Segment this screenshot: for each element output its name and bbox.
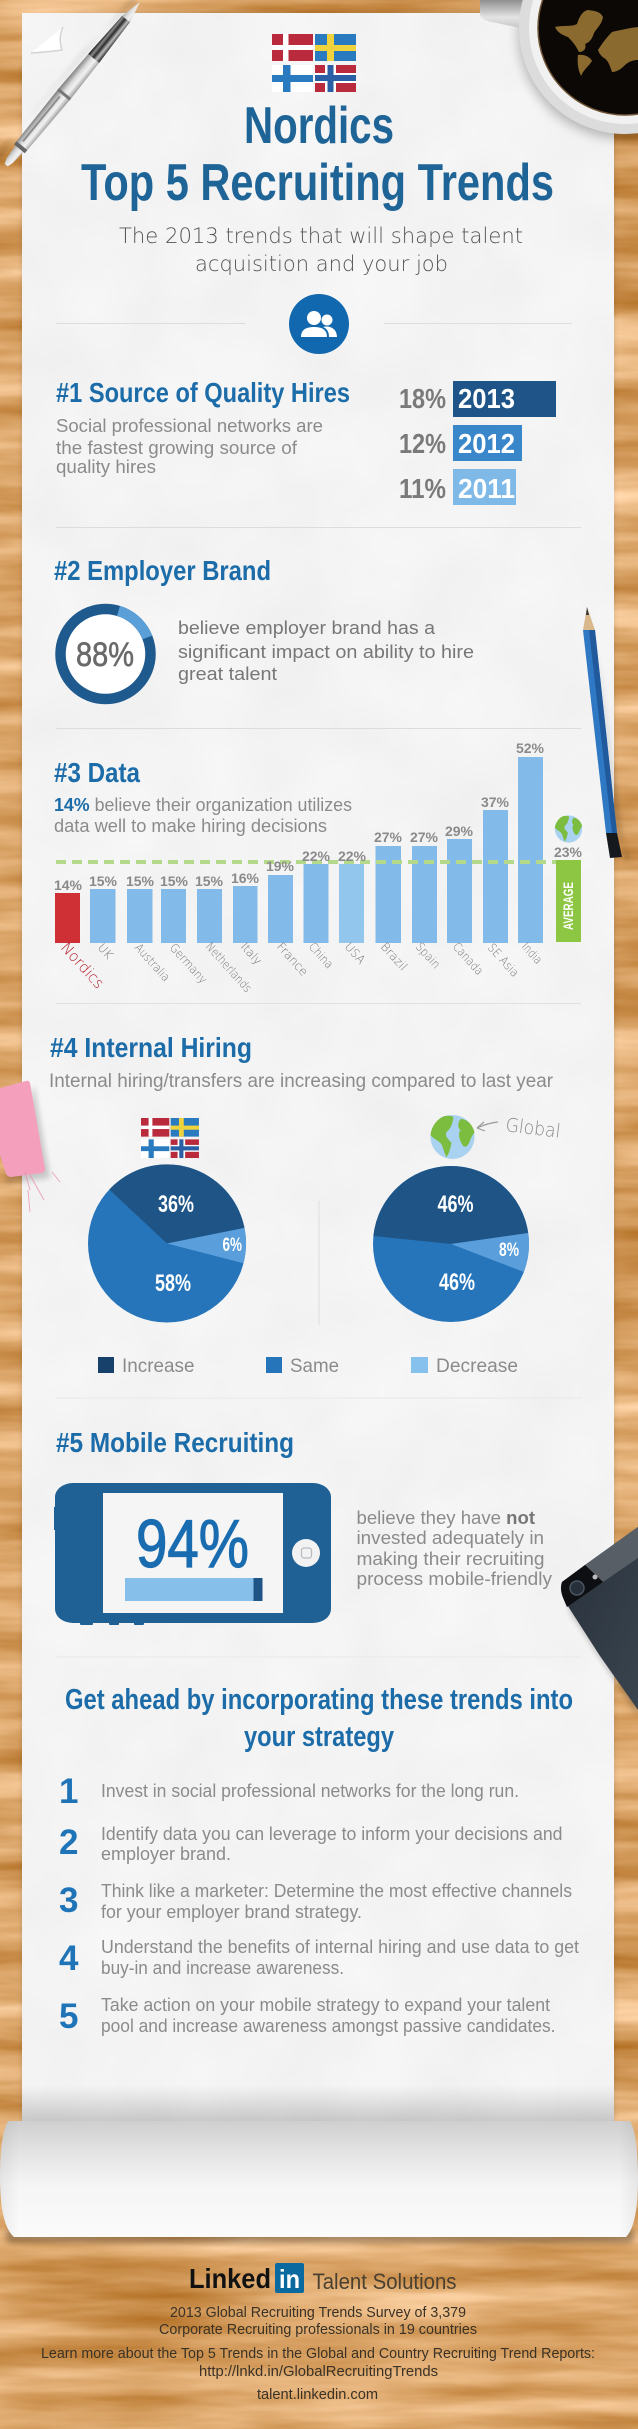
footer logo: LinkedIn Talent Solutions	[189, 2263, 456, 2294]
step 3: 3	[59, 1881, 78, 1920]
country labels: China	[306, 940, 336, 971]
bar chart: data use by country: 15%	[89, 873, 118, 889]
icon: ballpoint pen	[0, 0, 146, 170]
title: Nordics	[244, 97, 394, 155]
bar chart: data use by country: AVERAGE	[560, 882, 576, 930]
text block	[56, 416, 323, 477]
icon: blue pencil	[583, 607, 631, 860]
bar chart: share by year: 2013	[458, 383, 515, 414]
step 4: 4	[59, 1939, 79, 1978]
panel: #4 internal hiring	[49, 1032, 562, 1377]
step 5: Take action on your mobile strategy to expand your talent	[101, 1995, 550, 2015]
icon: phone illustration with 94%	[54, 1483, 331, 1625]
bar chart: data use by country: 15%	[126, 873, 155, 889]
country labels: India	[519, 940, 545, 967]
step 4: buy-in and increase awareness.	[101, 1958, 344, 1978]
bar chart: data use by country: 15%	[160, 873, 189, 889]
step 2: employer brand.	[101, 1844, 231, 1864]
bar chart: data use by country: 23%	[554, 844, 583, 860]
pie chart: Nordics: 6%	[222, 1235, 242, 1256]
bar chart: share by year: 11%	[399, 473, 446, 504]
bar chart: data use by country: 27%	[374, 829, 403, 845]
country labels: Canada	[450, 940, 486, 978]
bar chart: share by year: 12%	[399, 428, 446, 459]
footer text: http://lnkd.in/GlobalRecruitingTrends	[199, 2363, 438, 2380]
bar chart: data use by country: 14%	[54, 877, 83, 893]
label: Global with arrow: Global	[504, 1114, 562, 1143]
footer text: Learn more about the Top 5 Trends in the Global and Country Recruiting Trend Reports:	[41, 2345, 595, 2362]
step 3: for your employer brand strategy.	[101, 1902, 362, 1922]
bar chart: share by year: 18%	[399, 383, 446, 414]
bar chart: data use by country	[54, 740, 583, 995]
heading: #1 Source of Quality Hires	[56, 377, 350, 408]
divider with people icon	[56, 294, 572, 354]
pie chart: Nordics	[88, 1164, 246, 1322]
icon: globe	[555, 815, 582, 843]
legend: Increase	[122, 1356, 194, 1377]
text block: process mobile-friendly	[356, 1569, 552, 1589]
country labels: France	[274, 940, 311, 979]
donut chart: 88%	[60, 609, 150, 699]
country labels: Nordics	[57, 939, 108, 992]
icon: iPhone on table	[561, 1527, 638, 1716]
subtitle: acquisition and your job	[195, 252, 448, 276]
country labels: Germany	[167, 941, 210, 986]
bar chart: data use by country: 22%	[338, 848, 367, 864]
text block: 14% believe their organization utilizes	[54, 795, 352, 815]
step 3	[59, 1881, 572, 1922]
step 2	[59, 1823, 562, 1864]
subtitle	[119, 224, 523, 276]
bar chart: data use by country: 52%	[516, 740, 545, 756]
country labels: USA	[342, 940, 368, 967]
subtitle: The 2013 trends that will shape talent	[119, 224, 523, 248]
panel: #5 mobile recruiting	[54, 1427, 552, 1625]
step 3: Think like a marketer: Determine the most effective channels	[101, 1881, 572, 1901]
country labels: Spain	[413, 940, 443, 971]
icon: pink eraser	[0, 1081, 60, 1212]
rolled paper bottom	[0, 2121, 638, 2243]
step 1: Invest in social professional networks for the long run.	[101, 1781, 519, 1801]
text block: data well to make hiring decisions	[54, 816, 327, 836]
footer text: 2013 Global Recruiting Trends Survey of 3,379	[170, 2304, 466, 2321]
country labels: Netherlands	[203, 940, 255, 995]
footer logo: LinkedIn Talent Solutions: Linked	[189, 2263, 271, 2294]
text block: quality hires	[56, 457, 156, 477]
text block: invested adequately in	[356, 1528, 544, 1548]
heading: #5 Mobile Recruiting	[56, 1427, 294, 1458]
icon: phone illustration with 94%: 94%	[136, 1506, 249, 1582]
footer logo: LinkedIn Talent Solutions: in	[279, 2264, 300, 2294]
pie chart: Global: 8%	[499, 1240, 519, 1261]
panel: get ahead recommendations	[59, 1684, 579, 2036]
icon: coffee cup	[480, 0, 638, 138]
icon: gold world map in coffee	[555, 10, 638, 76]
text block: making their recruiting	[356, 1549, 544, 1569]
bar chart: data use by country: 29%	[445, 823, 474, 839]
text block	[54, 795, 352, 836]
bar chart: data use by country: 15%	[195, 873, 224, 889]
bar chart: data use by country: 19%	[266, 858, 295, 874]
country labels	[57, 939, 545, 995]
panel: #1 source of quality hires	[56, 377, 556, 505]
footer logo: LinkedIn Talent Solutions: Talent Solutions	[312, 2269, 456, 2294]
step 2: Identify data you can leverage to inform your decisions and	[101, 1824, 562, 1844]
panel: #2 employer brand	[54, 555, 474, 699]
step 5: 5	[59, 1997, 78, 2036]
country labels: Italy	[238, 940, 265, 968]
step 1	[59, 1772, 519, 1811]
footer text	[41, 2304, 595, 2403]
title	[81, 97, 554, 212]
legend: Same	[290, 1356, 339, 1377]
heading: #3 Data	[54, 757, 140, 788]
icon: flags of the Nordics	[141, 1118, 199, 1158]
step 1: 1	[59, 1772, 78, 1811]
bar chart: data use by country: 27%	[410, 829, 439, 845]
text block: great talent	[178, 664, 277, 684]
bar chart: data use by country: 22%	[302, 848, 331, 864]
bar chart: data use by country: 16%	[231, 870, 260, 886]
footer text: Corporate Recruiting professionals in 19 countries	[159, 2321, 477, 2338]
text block: the fastest growing source of	[56, 438, 298, 458]
step 2: 2	[59, 1823, 78, 1862]
pie chart: Global	[373, 1166, 529, 1322]
icon: globe	[430, 1115, 474, 1159]
footer text: talent.linkedin.com	[257, 2386, 378, 2403]
panel: #3 data	[54, 740, 583, 995]
text block: Internal hiring/transfers are increasing compared to last year	[49, 1071, 554, 1092]
step 4: Understand the benefits of internal hiring and use data to get	[101, 1937, 579, 1957]
pie chart: Nordics: 58%	[155, 1270, 191, 1297]
heading: your strategy	[244, 1721, 394, 1753]
legend: Decrease	[436, 1356, 518, 1377]
bar chart: share by year: 2012	[458, 428, 515, 459]
text block	[178, 618, 474, 684]
bar chart: share by year: 2011	[458, 473, 515, 504]
donut chart: 88%: 88%	[76, 636, 134, 674]
pie chart: Global: 46%	[438, 1191, 474, 1218]
step 5: pool and increase awareness amongst passive candidates.	[101, 2016, 556, 2036]
country labels: Australia	[132, 941, 173, 984]
text block: significant impact on ability to hire	[178, 642, 474, 662]
text block	[356, 1508, 552, 1589]
country labels: SE Asia	[485, 941, 522, 980]
bar chart: share by year	[399, 381, 556, 505]
icon: flags of the Nordics	[272, 34, 356, 92]
text block: believe they have not	[356, 1508, 535, 1528]
label: Global with arrow	[477, 1114, 562, 1143]
heading: #4 Internal Hiring	[50, 1032, 252, 1063]
heading	[65, 1684, 573, 1753]
heading: #2 Employer Brand	[54, 555, 271, 586]
step 5	[59, 1995, 556, 2036]
country labels: UK	[95, 941, 116, 962]
pie chart: Nordics: 36%	[158, 1191, 194, 1218]
pie chart: Global: 46%	[439, 1269, 475, 1296]
text block: believe employer brand has a	[178, 618, 436, 638]
country labels: Brazil	[378, 940, 410, 974]
bar chart: data use by country: 37%	[481, 794, 510, 810]
legend	[98, 1356, 518, 1377]
step 4	[59, 1937, 579, 1978]
text block: Social professional networks are	[56, 416, 323, 436]
